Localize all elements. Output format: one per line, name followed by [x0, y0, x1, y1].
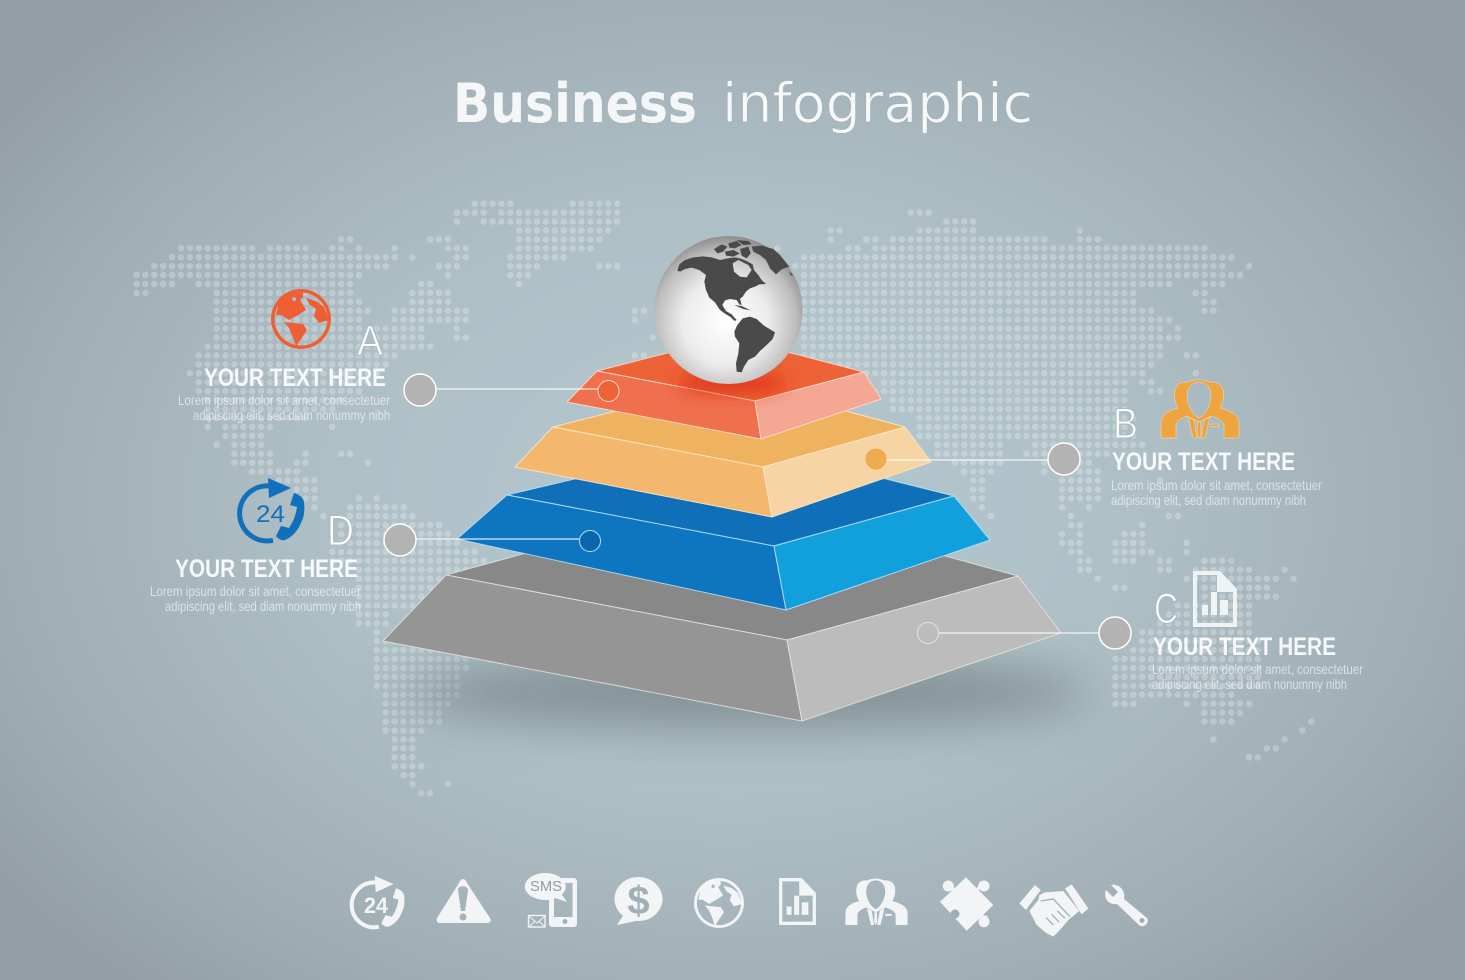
block C — [1152, 571, 1363, 692]
globe — [654, 236, 802, 384]
letter D: D — [327, 507, 354, 555]
text C: adipiscing elit, sed diam nonummy nibh — [1152, 676, 1347, 692]
heading D: YOUR TEXT HERE — [175, 555, 358, 583]
icon: globe — [694, 878, 744, 928]
pyramid ground shadow — [400, 656, 1090, 728]
text C: Lorem ipsum dolor sit amet, consectetuer — [1152, 661, 1363, 677]
letter A: A — [357, 317, 383, 365]
globe shadow — [677, 372, 787, 394]
connector D — [384, 524, 600, 556]
icon: people B — [1161, 380, 1239, 438]
icon: 24h phone — [352, 876, 404, 927]
title — [453, 72, 1033, 135]
icon: warning — [437, 879, 491, 923]
layer: blue — [457, 441, 990, 610]
bottom icon row — [352, 873, 1148, 937]
layer: red — [567, 337, 881, 439]
title: infographic — [722, 72, 1033, 135]
text D: adipiscing elit, sed diam nonummy nibh — [165, 598, 361, 614]
heading C: YOUR TEXT HERE — [1153, 633, 1336, 661]
letter B: B — [1113, 400, 1138, 448]
icon: puzzle — [940, 877, 993, 931]
title: Business — [453, 72, 697, 135]
layer: orange — [515, 381, 931, 517]
icon: people — [845, 879, 908, 925]
icon: handshake — [1019, 884, 1088, 937]
heading A: YOUR TEXT HERE — [204, 364, 386, 392]
text D: Lorem ipsum dolor sit amet, consectetuer — [150, 583, 361, 599]
connector C — [918, 617, 1131, 649]
pyramid — [383, 337, 1061, 721]
block A — [178, 289, 390, 423]
text A: adipiscing elit, sed diam nonummy nibh — [193, 407, 390, 423]
connector A — [404, 374, 619, 406]
icon: SMS phone — [525, 873, 577, 927]
icon: wrench — [1105, 885, 1148, 926]
icon: document C — [1193, 571, 1237, 627]
letter C: C — [1154, 585, 1178, 633]
icon: 24h phone D — [240, 478, 304, 541]
icon: dollar bubble — [614, 877, 662, 925]
block D — [150, 478, 361, 614]
layer: gray base — [383, 497, 1061, 721]
icon: 24h phone: 24 — [364, 893, 389, 918]
icon: SMS phone: SMS — [530, 878, 562, 895]
text A: Lorem ipsum dolor sit amet, consectetuer — [178, 392, 390, 408]
icon: globe A — [271, 289, 331, 349]
text B: adipiscing elit, sed diam nonummy nibh — [1111, 492, 1306, 508]
text B: Lorem ipsum dolor sit amet, consectetuer — [1111, 477, 1322, 493]
connector B — [866, 443, 1080, 475]
dotted world map — [136, 204, 1311, 793]
icon: document — [779, 878, 816, 925]
icon: dollar bubble: $ — [627, 879, 650, 923]
block B — [1111, 380, 1322, 508]
icon: 24h phone D: 24 — [256, 501, 285, 528]
heading B: YOUR TEXT HERE — [1112, 448, 1295, 476]
